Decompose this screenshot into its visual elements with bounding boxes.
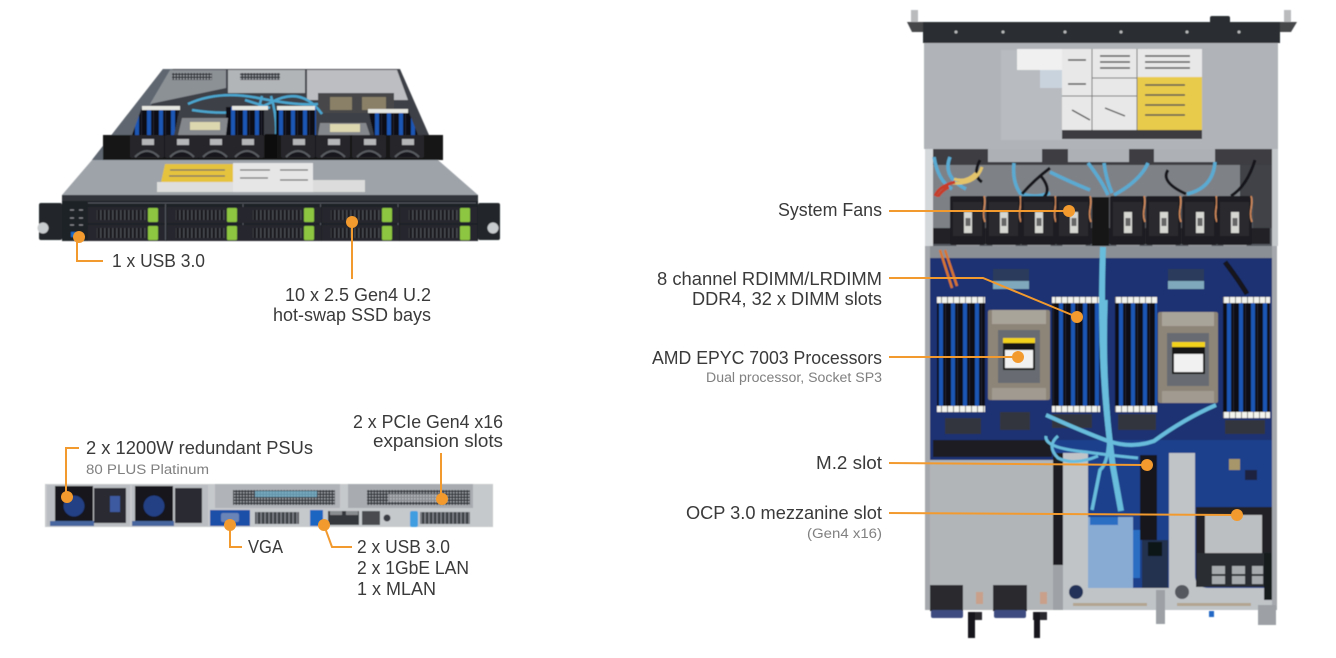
callout: processors <box>652 347 1024 385</box>
callout: rear ports <box>318 519 469 599</box>
callout: front USB: 1 x USB 3.0 <box>112 250 205 271</box>
front panel <box>38 195 500 241</box>
callout: front USB <box>73 231 205 271</box>
callout: M.2 slot: M.2 slot <box>816 452 882 473</box>
callout: OCP slot: (Gen4 x16) <box>807 526 882 541</box>
riser cards and board section <box>1053 440 1277 610</box>
memory banks <box>132 106 418 135</box>
power supplies <box>47 485 208 526</box>
panel: front view server <box>38 69 500 241</box>
callout: VGA <box>224 519 284 557</box>
panel: rear view server <box>45 484 493 527</box>
power supply block <box>925 460 1053 638</box>
callout: OCP slot: OCP 3.0 mezzanine slot <box>686 502 882 523</box>
callout: PCIe slots <box>353 411 503 505</box>
callout: rear ports: 1 x MLAN <box>357 578 436 599</box>
memory slots <box>937 297 1270 418</box>
callout: PCIe slots: expansion slots <box>373 430 503 451</box>
callout: PCIe slots: 2 x PCIe Gen4 x16 <box>353 411 503 432</box>
rear I/O ports <box>210 510 470 527</box>
callout: memory <box>657 268 1083 323</box>
callout: processors: Dual processor, Socket SP3 <box>706 370 882 385</box>
callout: SSD bays: 10 x 2.5 Gen4 U.2 <box>285 284 431 305</box>
top cover <box>924 43 1278 149</box>
expansion slots <box>215 484 473 508</box>
callout: system fans: System Fans <box>778 199 882 220</box>
callout: PSUs: 2 x 1200W redundant PSUs <box>86 437 313 458</box>
chassis interior <box>92 69 440 160</box>
callout: VGA: VGA <box>248 536 284 557</box>
rear chassis body <box>45 484 493 527</box>
processor sockets <box>988 310 1218 403</box>
top cover with stickers <box>62 160 478 195</box>
system fans <box>933 196 1272 250</box>
callout: memory: 8 channel RDIMM/LRDIMM <box>657 268 882 289</box>
sticker block <box>1017 49 1202 139</box>
front bar and ears <box>907 10 1297 43</box>
callout: memory: DDR4, 32 x DIMM slots <box>692 288 882 309</box>
chassis base <box>925 149 1277 610</box>
blue data cables <box>1046 247 1216 511</box>
callout: OCP slot <box>686 502 1243 541</box>
callout: PSUs: 80 PLUS Platinum <box>86 462 209 477</box>
cable bay <box>925 149 1278 246</box>
callout: rear ports: 2 x USB 3.0 <box>357 536 450 557</box>
callout: rear ports: 2 x 1GbE LAN <box>357 557 469 578</box>
panel: top view server <box>907 10 1297 638</box>
callout: SSD bays: hot-swap SSD bays <box>273 304 431 325</box>
callout: M.2 slot <box>816 452 1153 473</box>
drive bays <box>88 207 477 241</box>
motherboard <box>925 246 1277 460</box>
callout: PSUs <box>61 437 313 503</box>
chassis side rails <box>925 246 1277 625</box>
callout: system fans <box>778 199 1075 220</box>
callout: processors: AMD EPYC 7003 Processors <box>652 347 882 368</box>
OCP mezzanine bay <box>1196 507 1273 600</box>
system fans <box>103 134 443 160</box>
callout: SSD bays <box>273 216 431 325</box>
